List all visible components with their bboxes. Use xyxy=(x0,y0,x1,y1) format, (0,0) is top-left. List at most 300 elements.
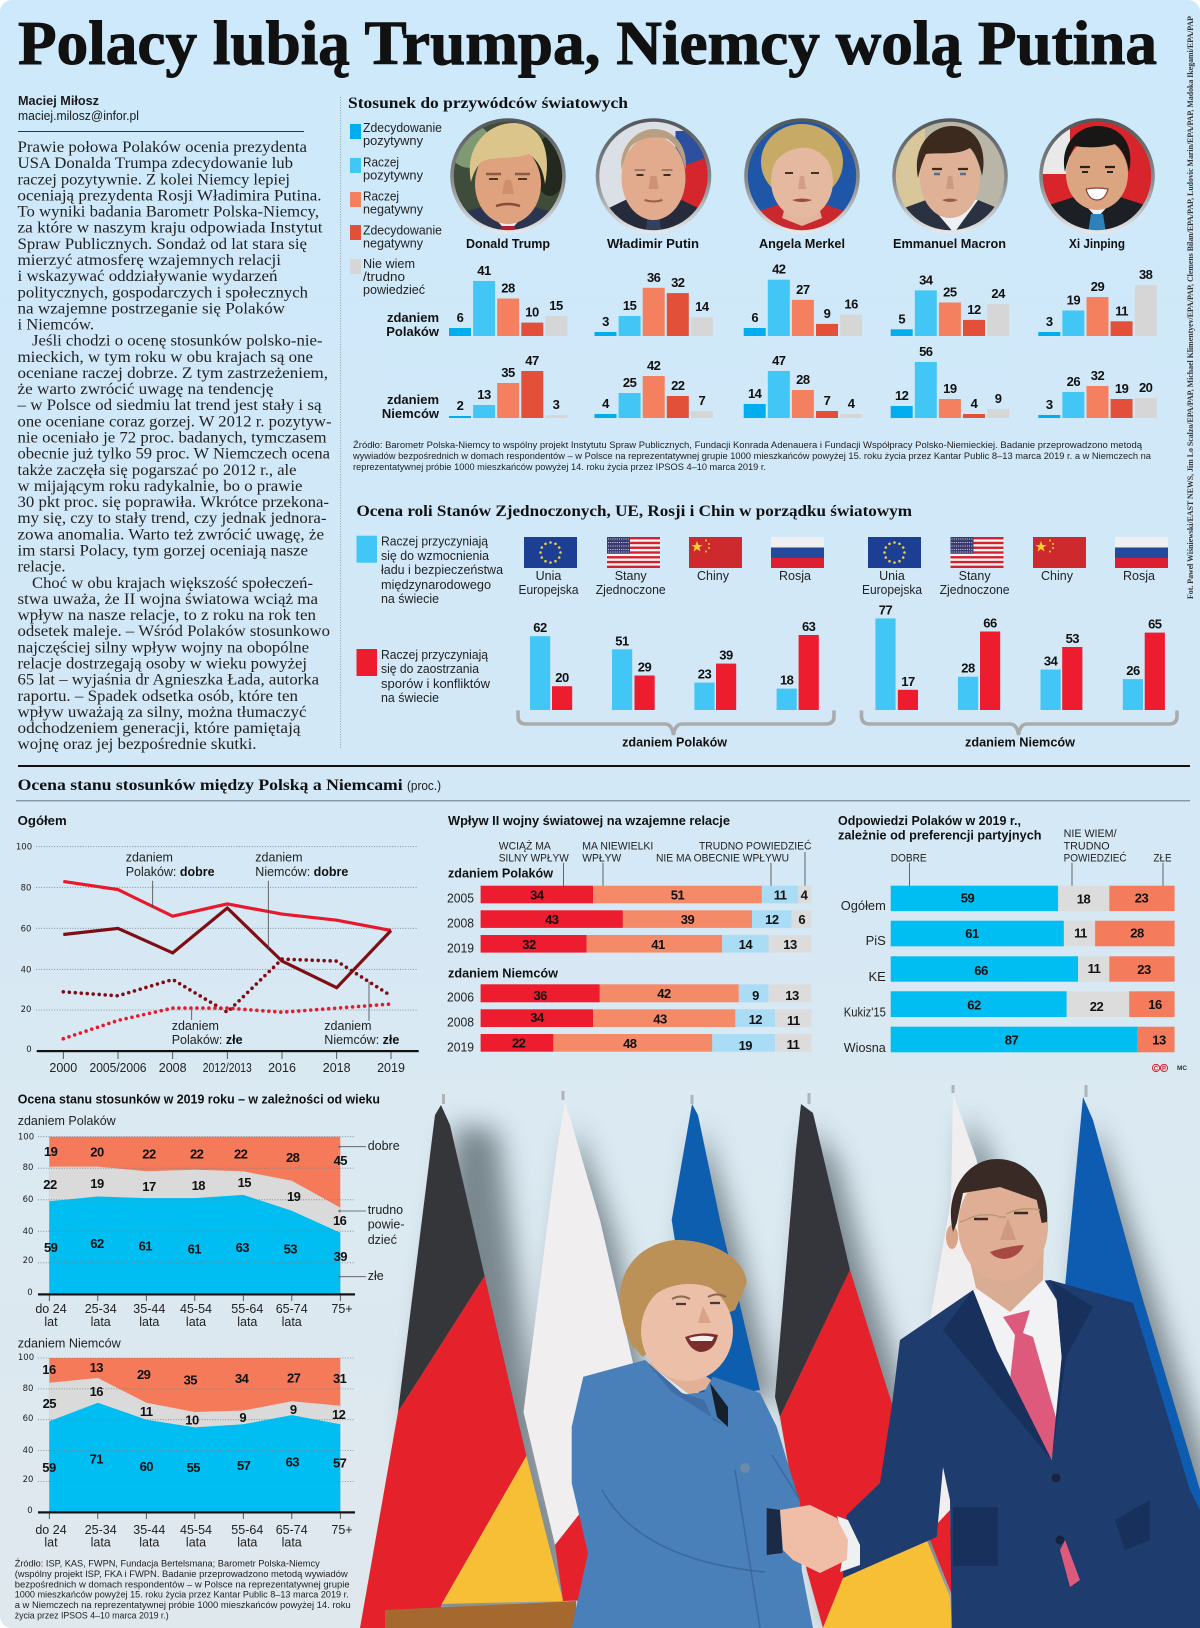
area chart: Germans by age: 34 xyxy=(235,1371,250,1386)
logo mark xyxy=(1152,1064,1187,1072)
legend: leaders: negatywny xyxy=(363,202,424,216)
legend: sharpen conflicts: sporów i konfliktów xyxy=(381,677,491,691)
bar chart: opinions of Germans: 3 xyxy=(1046,397,1053,412)
area chart: Germans by age: 71 xyxy=(90,1452,103,1466)
stacked bars: parties: 23 xyxy=(1135,890,1148,906)
area chart: Poles by age: 22 xyxy=(234,1146,248,1162)
flags: German opinions: Rosja xyxy=(1123,569,1155,583)
stacked bars: Poles: 12 xyxy=(765,912,779,927)
axes and grid: 2018 xyxy=(323,1061,351,1075)
flags: Polish opinions xyxy=(518,537,824,597)
axes and grid xyxy=(16,843,419,1075)
stacked bars: Poles: 2008 xyxy=(447,916,474,931)
stacked bars: Germans: 12 xyxy=(749,1012,762,1027)
line: Poles bad xyxy=(63,1004,391,1039)
source note: age: a w Niemczech na reprezentatywnej próbie 1000 mieszkańców powyżej 14. roku xyxy=(15,1600,351,1611)
leader names: Angela Merkel xyxy=(759,236,845,251)
callouts: dobre, trudno powiedzieć, złe: trudno xyxy=(368,1203,403,1217)
source note: age: Źródło: ISP, KAS, FWPN, Fundacja Bertelsmana; Barometr Polska-Niemcy xyxy=(15,1559,320,1570)
area chart: Germans by age: 59 xyxy=(42,1460,56,1475)
author block xyxy=(18,93,304,132)
portrait: Xi Jinping xyxy=(1040,119,1154,233)
stacked bars: Poles: 2019 xyxy=(447,941,474,956)
area chart: Poles by age: 16 xyxy=(333,1213,347,1228)
bar chart: opinions of Germans: 2 xyxy=(457,398,464,413)
bar chart: opinions of Poles: 16 xyxy=(844,297,858,312)
area chart: Germans by age: 57 xyxy=(237,1458,251,1473)
area chart: Poles by age: 20 xyxy=(23,1256,33,1266)
stacked bars: parties: 16 xyxy=(1148,997,1162,1012)
legend: sharpen conflicts: Raczej przyczyniają xyxy=(381,648,488,662)
flag: Germany 1 xyxy=(360,1094,563,1628)
series annotations: DOBRE xyxy=(891,852,927,864)
photo credit: Fot. Paweł Wiśniewski/EAST NEWS, Jim Lo Scalzo/EPA/PAP, Michael Klimentyev/EPA/PAP, Clemens Bilan/EPA/PAP, Ludovic Marin/EPA/PAP, Madoka Ikegami/EPA/PAP xyxy=(1186,16,1195,599)
title: Polacy lubią Trumpa, Niemcy wolą Putina xyxy=(18,10,1157,78)
area chart: Germans by age: 40 xyxy=(23,1446,33,1456)
stacked bars: Germans: 19 xyxy=(739,1038,752,1053)
bar chart: opinions of Poles: 6 xyxy=(457,310,464,325)
article text: odsetek maleje. – Wśród Polaków stosunkowo xyxy=(18,623,330,640)
brace: zdaniem Niemców xyxy=(862,710,1177,750)
source note: age: (wspólny projekt ISP, FKA i FWPN. Badanie przeprowadzono metodą wywiadów xyxy=(15,1569,348,1580)
article text: relacje. xyxy=(18,559,66,576)
article text: wojnę oraz jej bezpośrednie skutki. xyxy=(18,736,256,753)
article text: wpływ uważają za silny, można tłumaczyć xyxy=(18,704,306,721)
flags: Polish opinions: Europejska xyxy=(518,583,579,597)
article text: obecnie już tylko 59 proc. W Niemczech ocena xyxy=(18,446,330,463)
area chart: Germans by age: 13 xyxy=(90,1360,103,1375)
bar chart: opinions of Poles: 42 xyxy=(772,262,786,277)
flag: Poland 1 xyxy=(524,1091,640,1601)
stacked bars: parties: 28 xyxy=(1130,926,1144,940)
bar chart: opinions of Germans: 22 xyxy=(671,378,685,393)
area chart: Poles by age: 19 xyxy=(287,1189,301,1204)
area chart: Germans by age: 55 xyxy=(187,1460,200,1475)
area chart: Poles by age: 28 xyxy=(286,1150,300,1165)
row labels: Niemców xyxy=(382,406,440,421)
bar chart: opinions of Poles: 3 xyxy=(1046,314,1053,329)
axes and grid: 0 xyxy=(26,1045,32,1055)
flags: German opinions: Stany xyxy=(959,569,991,583)
bar chart: role per Germans: 77 xyxy=(879,602,892,617)
legend: leaders: pozytywny xyxy=(363,134,424,148)
bar chart: opinions of Germans: 4 xyxy=(848,396,856,411)
bar chart: opinions of Germans: 7 xyxy=(699,393,706,408)
legend: sharpen conflicts xyxy=(356,648,491,705)
area chart: Poles by age: 22 xyxy=(190,1146,204,1162)
area chart: Germans by age: 55-64 xyxy=(231,1523,263,1537)
legend: leaders: Raczej xyxy=(363,156,399,170)
bar chart: opinions of Poles: 27 xyxy=(796,282,810,297)
flags: German opinions: Europejska xyxy=(862,583,922,597)
stacked bars: parties: 13 xyxy=(1152,1032,1166,1048)
callouts: dobre, trudno powiedzieć, złe xyxy=(338,1139,405,1283)
heading: party preferences xyxy=(838,813,1042,842)
stacked bars: Germans: 2008 xyxy=(447,1015,474,1030)
area chart: Poles by age: 39 xyxy=(334,1249,347,1264)
bar chart: opinions of Germans xyxy=(449,344,1157,418)
area chart: Poles by age: lata xyxy=(282,1315,302,1329)
bar chart: opinions of Poles: 29 xyxy=(1091,279,1104,294)
stacked bars: Poles: 11 xyxy=(774,888,787,902)
article text: stwa uważa, że II wojna światowa wciąż ma xyxy=(18,591,318,608)
bar chart: opinions of Germans: 4 xyxy=(602,396,610,411)
stacked bars: Germans: 42 xyxy=(657,986,671,1001)
article text: w mijającym roku radykalnie, bo o prawie xyxy=(18,478,302,495)
callout: Germans bad: zdaniem xyxy=(324,1019,372,1033)
legend: leaders xyxy=(350,121,442,297)
bar chart: opinions of Poles: 38 xyxy=(1139,267,1153,282)
bar chart: opinions of Poles: 15 xyxy=(549,298,563,313)
area chart: Germans by age: 0 xyxy=(27,1506,33,1516)
stacked bars: Poles: 6 xyxy=(798,912,805,927)
bar chart: role per Germans: 26 xyxy=(1126,663,1140,678)
article text: i Niemców. xyxy=(18,316,94,334)
area chart: Poles by age: 18 xyxy=(192,1178,205,1193)
area chart: Poles by age: lata xyxy=(186,1315,206,1329)
bar chart: opinions of Germans: 3 xyxy=(553,397,560,412)
bar chart: opinions of Poles: 34 xyxy=(919,272,934,287)
stacked bars: parties: 59 xyxy=(961,890,974,906)
bar chart: role per Poles: 23 xyxy=(698,667,711,682)
person: Mateusz Morawiecki xyxy=(837,1159,1200,1628)
heading: world order: Ocena roli Stanów Zjednoczonych, UE, Rosji i Chin w porządku światowym xyxy=(356,503,913,520)
stacked bars: parties: 11 xyxy=(1088,961,1101,976)
bar chart: role per Germans: 28 xyxy=(961,661,975,676)
stacked bars: parties: 11 xyxy=(1074,926,1087,940)
author block: Maciej Miłosz xyxy=(18,93,99,108)
stacked bars: Germans: 2006 xyxy=(447,990,474,1005)
article text: To wyniki badania Barometr Polska-Niemcy, xyxy=(18,204,319,221)
stacked bars: Germans: 2019 xyxy=(447,1040,474,1055)
brace: zdaniem Polaków xyxy=(518,710,834,750)
flag: EU 2 xyxy=(1065,1085,1200,1628)
bar chart: opinions of Germans: 7 xyxy=(824,393,831,408)
area chart: Germans by age: 80 xyxy=(23,1384,33,1394)
source note: age: bezpośrednich w domach respondentów – w Polsce na reprezentatywnej grupie xyxy=(15,1579,350,1590)
axes and grid: 20 xyxy=(21,1005,31,1015)
bar chart: opinions of Poles: 14 xyxy=(695,299,710,314)
sub-heading: Germans by age: zdaniem Niemców xyxy=(18,1335,121,1350)
axes and grid: 2008 xyxy=(159,1061,187,1075)
section heading: Polish-German relations: Ocena stanu stosunków między Polską a Niemcami xyxy=(18,777,403,794)
area chart: Germans by age: 100 xyxy=(18,1353,34,1363)
bar chart: role per Poles: 20 xyxy=(555,670,569,685)
stacked bars: Germans: 22 xyxy=(512,1036,526,1050)
source note: leaders: Źródło: Barometr Polska-Niemcy to wspólny projekt Instytutu Spraw Publicznych, Fundacji Konrada Adenauera i Fundacji Współpracy Polsko-Niemieckiej. Badanie przeprowadzono metodą xyxy=(353,440,1143,451)
article text: oceniają prezydenta Rosji Władimira Putina. xyxy=(18,187,321,204)
area chart: Poles by age: 35-44 xyxy=(133,1302,165,1316)
handshake xyxy=(780,1505,848,1573)
article text: także zaczęła się pogarszać po 2012 r., ale xyxy=(18,462,296,479)
bar chart: opinions of Poles: 3 xyxy=(602,314,609,329)
area chart: Poles by age: do 24 xyxy=(35,1302,67,1316)
area chart: Poles by age: lata xyxy=(91,1315,111,1329)
logo mark: MC xyxy=(1177,1065,1187,1072)
bar chart: opinions of Germans: 47 xyxy=(525,353,539,368)
area chart: Poles by age: lata xyxy=(139,1315,159,1329)
area chart: Poles by age: 65-74 xyxy=(276,1302,308,1316)
sub-heading: Poles: zdaniem Polaków xyxy=(448,866,554,881)
stacked bars: Poles: 13 xyxy=(783,937,797,952)
bar chart: role per Poles: 51 xyxy=(615,633,629,648)
bar chart: opinions of Poles: 5 xyxy=(898,311,905,326)
area chart: Germans by age: 35 xyxy=(184,1372,197,1388)
callout: Poles good: Polaków: dobre xyxy=(126,865,215,879)
heading: leaders: Stosunek do przywódców światowych xyxy=(348,95,628,112)
area chart: Germans by age: 12 xyxy=(332,1407,346,1422)
area chart: Germans by age: 11 xyxy=(140,1404,153,1419)
bar chart: opinions of Germans: 42 xyxy=(647,358,661,373)
article text: najczęściej silny wpływ wojny na obopólne xyxy=(18,639,309,656)
source note: age: 1000 mieszkańców powyżej 15. roku życia przez Kantar Public 8–13 marca 2019 r. xyxy=(15,1590,349,1600)
source note: age xyxy=(15,1559,351,1621)
stacked bars: Germans: 43 xyxy=(653,1012,667,1026)
portrait: Wladimir Putin xyxy=(596,119,716,233)
line: Germans bad xyxy=(63,959,391,1012)
legend: sharpen conflicts: się do zaostrzania xyxy=(381,662,479,676)
bar chart: opinions of Germans: 9 xyxy=(995,391,1002,406)
callout: Poles bad: Polaków: złe xyxy=(172,1033,243,1047)
callouts: dobre, trudno powiedzieć, złe: dzieć xyxy=(368,1233,397,1247)
line: Poles good xyxy=(63,881,391,930)
flags: German opinions: Zjednoczone xyxy=(940,583,1010,597)
callout: Germans good: zdaniem xyxy=(255,851,303,865)
panel: influence of WWII xyxy=(447,813,812,1055)
sub-heading: Poles by age: zdaniem Polaków xyxy=(18,1113,116,1128)
article text: że warto zwrócić uwagę na tendencję xyxy=(18,381,274,398)
legend: strengthen order: międzynarodowego xyxy=(381,578,491,592)
axes and grid: 100 xyxy=(16,843,32,853)
panel: age charts xyxy=(15,1091,405,1621)
portrait: Emmanuel Macron xyxy=(893,119,1007,233)
article text: mieckich, w tym roku w obu krajach są one xyxy=(18,349,313,366)
area chart: Poles by age: lat xyxy=(44,1315,58,1329)
bar chart: role per Poles: 29 xyxy=(638,660,651,674)
bar chart: opinions of Germans: 20 xyxy=(1139,380,1153,395)
flags: German opinions: Unia xyxy=(879,569,905,583)
leader names: Donald Trump xyxy=(466,236,550,251)
area chart: Germans by age: 60 xyxy=(23,1414,33,1424)
area chart: Poles by age: 61 xyxy=(188,1242,201,1256)
area chart: Germans by age: 45-54 xyxy=(180,1523,212,1537)
panel: party preferences xyxy=(838,813,1187,1072)
article text: one oceniane coraz gorzej. W 2012 r. pozytyw- xyxy=(18,413,332,430)
article text: my się, czy to stały trend, czy jednak jednora- xyxy=(18,510,326,527)
area chart: Germans by age: 16 xyxy=(90,1384,103,1399)
heading: WWII: Wpływ II wojny światowej na wzajemne relacje xyxy=(448,813,730,828)
area chart: Germans by age: 25-34 xyxy=(85,1523,117,1537)
stacked bars: Germans xyxy=(447,984,812,1055)
stacked bars: parties: Wiosna xyxy=(844,1040,887,1055)
bar chart: opinions of Germans: 28 xyxy=(796,372,810,387)
stacked bars: Poles xyxy=(447,886,812,956)
legend: strengthen order xyxy=(356,535,503,606)
stacked bars: Poles: 4 xyxy=(801,888,809,902)
area chart: Germans by age: lat xyxy=(44,1536,58,1550)
area chart: Poles by age: 62 xyxy=(90,1236,104,1251)
leader names xyxy=(466,236,1125,251)
bar chart: opinions of Poles: 41 xyxy=(477,263,491,278)
area chart: Poles by age: lata xyxy=(237,1315,257,1329)
legend: leaders: Nie wiem xyxy=(363,257,415,271)
callouts: dobre, trudno powiedzieć, złe: dobre xyxy=(368,1139,400,1153)
series annotations xyxy=(499,839,812,887)
axes and grid: 2019 xyxy=(377,1061,405,1075)
area chart: Germans by age: lata xyxy=(237,1536,257,1550)
bar chart: opinions of Germans: 4 xyxy=(971,396,979,411)
stacked bars: parties: 23 xyxy=(1137,962,1151,977)
flag: EU 1 xyxy=(672,1095,760,1400)
area chart: Poles by age: 20 xyxy=(90,1144,104,1160)
legend: strengthen order: Raczej przyczyniają xyxy=(381,535,488,549)
area chart: Germans by age: 75+ xyxy=(331,1523,353,1537)
stacked bars: Poles: 2005 xyxy=(447,891,474,906)
area chart: Germans by age: 9 xyxy=(239,1410,246,1425)
bar chart: opinions of Germans: 13 xyxy=(477,387,491,402)
bar chart: opinions of Poles: 32 xyxy=(671,275,685,290)
area chart: Germans by age: lata xyxy=(186,1536,206,1550)
wooden furniture xyxy=(385,1601,576,1628)
source note: leaders: reprezentatywnej próbie 1000 mieszkańców powyżej 14. roku życia przez IPSOS 4–10 marca 2019 r. xyxy=(353,462,766,473)
stacked bars: parties: 62 xyxy=(967,998,981,1012)
series annotations: WCIĄŻ MA xyxy=(499,839,551,852)
legend: leaders: negatywny xyxy=(363,236,424,250)
article text: Choć w obu krajach większość społeczeń- xyxy=(32,575,313,592)
stacked bars: parties xyxy=(841,886,1175,1055)
bar chart: role per Germans: 66 xyxy=(983,616,997,630)
panel: line chart overall xyxy=(16,813,419,1075)
area chart: Poles by age: 19 xyxy=(44,1144,58,1159)
leader names: Władimir Putin xyxy=(607,236,699,251)
series annotations: WPŁYW xyxy=(582,852,622,864)
area chart: Poles by age: 60 xyxy=(23,1195,33,1205)
area chart: Germans by age: 60 xyxy=(140,1459,153,1474)
bar chart: opinions of Poles: 6 xyxy=(751,310,758,325)
person: Angela Merkel xyxy=(572,1240,813,1628)
leader names: Xi Jinping xyxy=(1069,236,1125,251)
stacked bars: Poles: 41 xyxy=(651,937,665,952)
area chart: Germans by age: 16 xyxy=(42,1362,56,1377)
article text: Spraw Publicznych. Sondaż od lat stara się xyxy=(18,236,307,253)
flag shadows xyxy=(412,1115,1200,1628)
bar chart: role per Germans: 65 xyxy=(1148,617,1162,632)
brace: zdaniem Polaków: zdaniem Polaków xyxy=(622,735,728,750)
stacked bars: Poles: 34 xyxy=(530,888,545,902)
bar chart: opinions of Germans: 35 xyxy=(501,365,515,380)
axes and grid: 2016 xyxy=(268,1061,296,1075)
article text: wpływ na nasze relacje, to z roku na rok ten xyxy=(18,607,316,624)
stacked bars: Germans: 34 xyxy=(530,1010,545,1025)
stacked bars: parties: 66 xyxy=(974,963,988,978)
bar chart: opinions of Germans: 56 xyxy=(919,344,933,359)
stacked bars: Germans: 48 xyxy=(623,1036,637,1051)
area chart: Poles by age: 0 xyxy=(27,1288,33,1298)
article text: za które w naszym kraju odpowiada Instytut xyxy=(18,220,323,237)
bar chart: role per Poles: 62 xyxy=(533,620,547,635)
stacked bars: parties: Kukiz'15 xyxy=(844,1005,886,1020)
flags: Polish opinions: Rosja xyxy=(779,569,811,583)
area chart: Germans by age: 35-44 xyxy=(133,1523,165,1537)
stacked bars: Poles: 39 xyxy=(681,912,694,927)
bar chart: opinions of Poles: 28 xyxy=(501,280,515,296)
bar chart: opinions of Germans: 47 xyxy=(772,353,786,368)
bar chart: role per Poles: 39 xyxy=(719,648,733,663)
article text: Prawie połowa Polaków ocenia prezydenta xyxy=(18,139,307,156)
area chart: Poles by age: 19 xyxy=(90,1176,104,1191)
stacked bars: Poles: 14 xyxy=(739,937,753,952)
area chart: Poles by age: 100 xyxy=(18,1132,34,1142)
bar chart: opinions of Poles: 12 xyxy=(967,302,981,317)
article text: nie oceniało je 72 proc. badanych, tymczasem xyxy=(18,430,327,446)
bar chart: opinions of Germans: 32 xyxy=(1091,368,1104,383)
author block: maciej.milosz@infor.pl xyxy=(18,108,139,123)
area chart: Poles by age: 53 xyxy=(284,1242,297,1256)
sub-heading: Germans: zdaniem Niemców xyxy=(448,965,559,980)
stacked bars: Germans: 13 xyxy=(785,988,799,1003)
section heading: Polish-German relations xyxy=(16,777,1190,801)
area chart: Germans by age: 31 xyxy=(333,1371,347,1386)
legend: strengthen order: ładu i bezpieczeństwa xyxy=(381,563,503,577)
area chart: Poles by age: 25-34 xyxy=(85,1302,117,1316)
legend: leaders: Zdecydowanie xyxy=(363,224,442,238)
leader names: Emmanuel Macron xyxy=(893,236,1006,251)
row labels xyxy=(382,310,440,421)
bar chart: opinions of Germans: 14 xyxy=(748,386,763,401)
area chart: Poles by age xyxy=(18,1132,355,1329)
series annotations: POWIEDZIEĆ xyxy=(1064,851,1127,864)
article text: odchodzeniem generacji, które pamiętają xyxy=(18,720,301,737)
area chart: Poles by age: 80 xyxy=(23,1163,33,1173)
axes and grid: 2012/2013 xyxy=(203,1061,252,1075)
article text: 65 lat – wyjaśnia dr Agnieszka Łada, autorka xyxy=(18,672,319,689)
bar chart: role per Germans: 17 xyxy=(901,674,915,689)
callouts: dobre, trudno powiedzieć, złe: złe xyxy=(368,1269,384,1283)
bar chart: opinions of Poles xyxy=(449,262,1157,336)
series annotations: MA NIEWIELKI xyxy=(582,840,653,852)
article text: USA Donalda Trumpa zdecydowanie lub xyxy=(18,155,293,172)
stacked bars: parties: PiS xyxy=(866,933,886,948)
series annotations xyxy=(891,828,1172,887)
axes and grid: 40 xyxy=(21,965,31,975)
heading: age: Ocena stanu stosunków w 2019 roku – w zależności od wieku xyxy=(18,1091,380,1106)
flag: Poland 2 xyxy=(930,1085,1010,1595)
heading: Ogółem: Ogółem xyxy=(18,813,67,828)
area chart: Poles by age: 17 xyxy=(142,1179,156,1194)
stacked bars: parties: 18 xyxy=(1077,892,1090,906)
area chart: Poles by age: 40 xyxy=(23,1227,33,1237)
logo mark: P xyxy=(1162,1066,1166,1072)
series annotations: NIE WIEM/ xyxy=(1064,828,1118,840)
series annotations: TRUDNO xyxy=(1064,840,1110,852)
bar chart: opinions of Poles: 25 xyxy=(943,284,957,300)
callouts: dobre, trudno powiedzieć, złe: powie- xyxy=(368,1218,405,1232)
bar chart: opinions of Poles: 9 xyxy=(824,306,831,321)
photo: Merkel and Morawiecki handshake with flags xyxy=(360,1085,1200,1628)
flags: German opinions: Chiny xyxy=(1041,569,1074,583)
area chart: Germans by age: lata xyxy=(139,1536,159,1550)
article text: na wzajemne postrzeganie się Polaków xyxy=(18,300,285,317)
bar chart: role per Germans xyxy=(875,602,1165,710)
stacked bars: Germans: 9 xyxy=(752,988,759,1003)
series annotations: ZŁE xyxy=(1154,852,1172,864)
area chart: Germans by age xyxy=(18,1353,355,1550)
bar chart: opinions of Germans: 19 xyxy=(943,381,957,396)
bar chart: role per Poles: 63 xyxy=(802,619,816,634)
callout: Germans good: Niemców: dobre xyxy=(255,865,348,879)
axes and grid: 80 xyxy=(21,883,31,893)
flags: Polish opinions: Zjednoczone xyxy=(596,583,666,597)
